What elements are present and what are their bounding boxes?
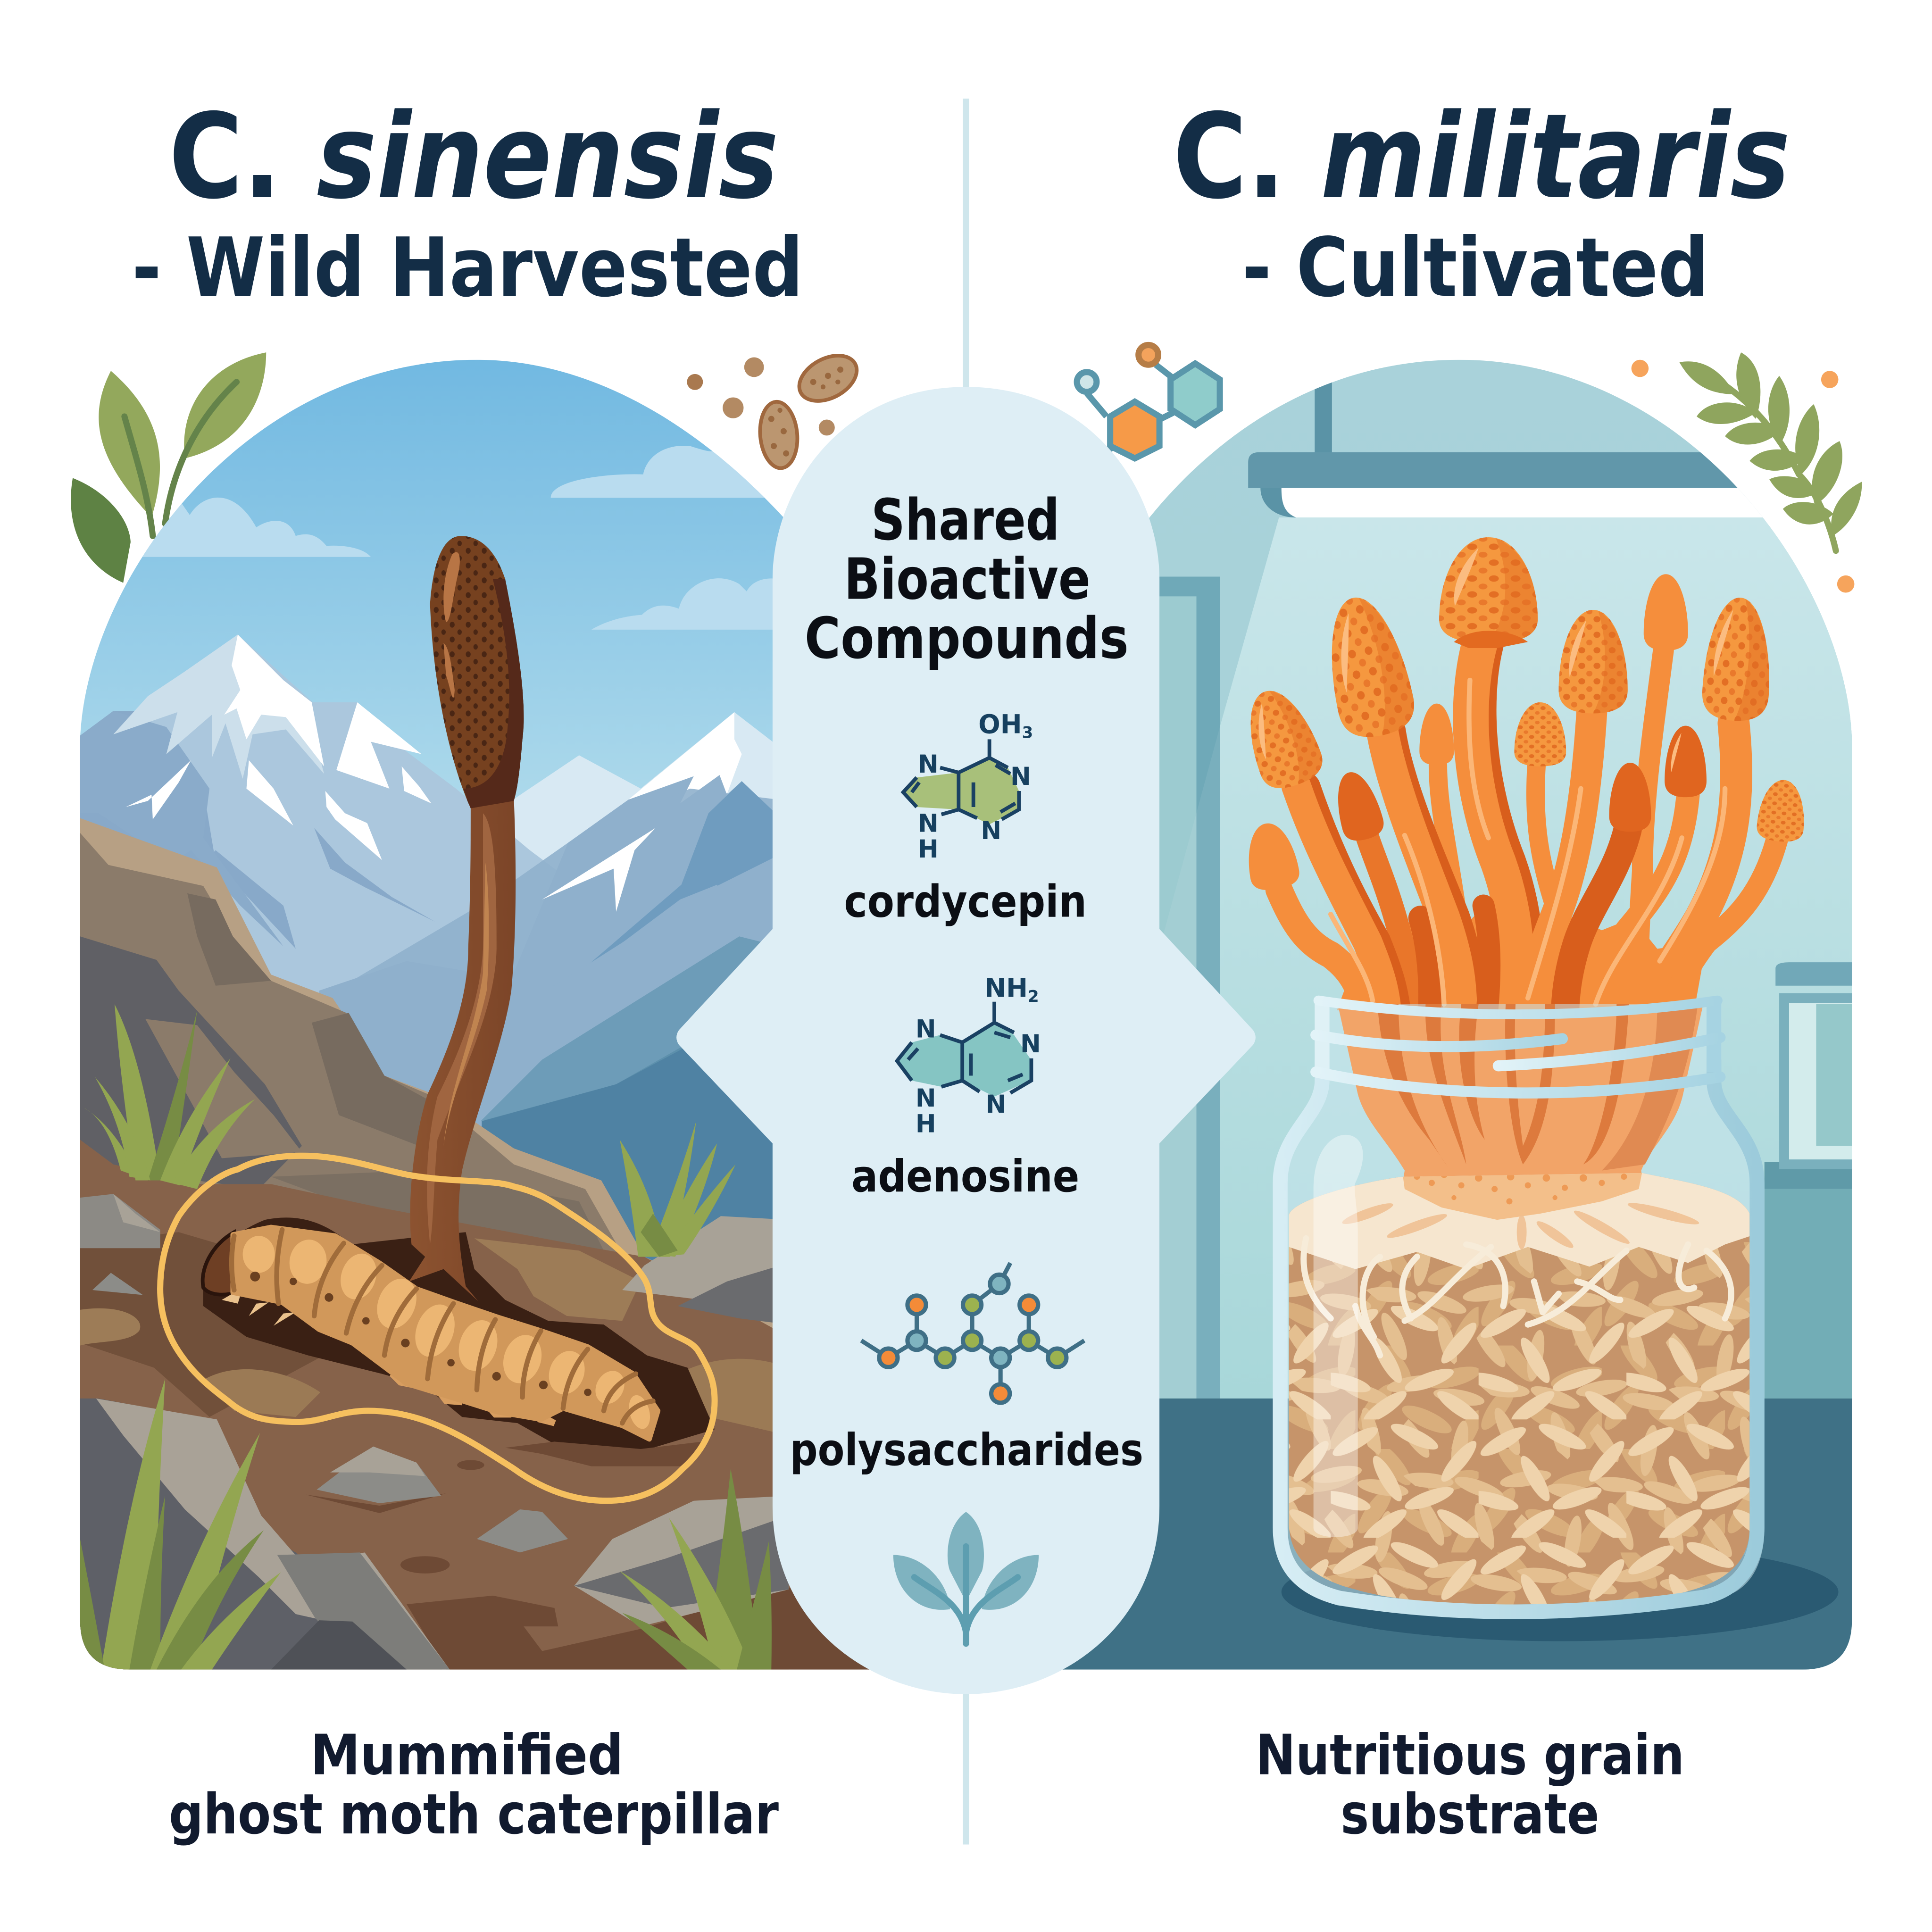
caterpillar in a burrow	[203, 1227, 658, 1439]
legs	[222, 1288, 296, 1326]
stalk highlights	[1331, 680, 1725, 1004]
body highlights	[243, 1236, 653, 1431]
icon: molecule top right	[1069, 345, 1220, 475]
icon: green sprig	[1679, 352, 1862, 551]
heading: shared bioactive compounds: Bioactive	[844, 547, 1091, 613]
snow	[113, 634, 742, 860]
chem icon: adenosine: N	[986, 1091, 1007, 1119]
orange funnel of stalks in the neck	[1337, 1000, 1704, 1201]
panel: shared bioactive compounds	[676, 387, 1256, 1694]
orange mushroom cluster	[1234, 537, 1807, 1023]
chem icon: cordycepin: N	[981, 817, 1001, 845]
chem icon: adenosine: N	[1020, 1030, 1041, 1058]
label: cordycepin: cordycepin	[844, 876, 1087, 928]
lamp light cone	[1152, 517, 1860, 1399]
spiracles	[250, 1272, 591, 1396]
caption: mummified ghost moth caterpillar: Mummified	[310, 1723, 624, 1788]
centre divider line	[965, 99, 967, 1845]
wall	[961, 351, 1860, 1682]
right mountain	[568, 775, 758, 843]
icon: sprout	[893, 1512, 1039, 1644]
label: polysaccharides: polysaccharides	[790, 1424, 1143, 1476]
stalks	[1279, 643, 1777, 1023]
mushroom cap	[430, 536, 524, 808]
caption: nutritious grain substrate: Nutritious grain	[1256, 1723, 1684, 1788]
icon: leaves top left	[71, 352, 266, 583]
chem icon: polysaccharide chain	[861, 1263, 1084, 1403]
glass fill	[1273, 1004, 1765, 1615]
chem icon: adenosine: N	[916, 1016, 936, 1044]
chem icon: adenosine: H	[916, 1110, 936, 1139]
chem icon: cordycepin: N	[918, 750, 939, 779]
chem icon: adenosine: N	[916, 1084, 936, 1113]
door frame	[1159, 577, 1220, 1402]
orange dots	[1632, 360, 1854, 592]
panel: wild mountain scene	[80, 359, 870, 1670]
jar shadow	[1282, 1543, 1838, 1641]
caption: nutritious grain substrate	[1256, 1723, 1684, 1847]
chem icon: adenosine: NH	[984, 973, 1028, 1003]
caption: mummified ghost moth caterpillar: ghost moth caterpillar	[169, 1782, 779, 1847]
jar highlight	[1314, 1135, 1363, 1537]
orange speckle band	[1402, 1171, 1642, 1220]
soil	[80, 1140, 974, 1676]
cliff: mid	[80, 833, 631, 1269]
lower blue ridge	[319, 858, 773, 1127]
caption: nutritious grain substrate: substrate	[1341, 1782, 1599, 1847]
heading: shared bioactive compounds	[805, 487, 1129, 672]
highlight loop around caterpillar	[160, 1156, 715, 1501]
table	[961, 1399, 1860, 1676]
neck rings	[1316, 1000, 1720, 1093]
sky	[80, 359, 783, 844]
left mountain shade	[80, 711, 296, 949]
cliff: tan	[80, 818, 789, 1676]
chem icon: cordycepin: H	[918, 835, 939, 864]
title: C. militaris - Cultivated: - Cultivated	[1242, 220, 1709, 315]
icon: brown spores	[687, 346, 865, 470]
chem icon: cordycepin	[903, 709, 1033, 864]
grain mass	[1282, 1165, 1762, 1608]
chem icon: adenosine	[897, 973, 1041, 1139]
cliff: dark	[80, 936, 302, 1189]
chem icon: cordycepin: N	[918, 809, 939, 838]
grass tufts	[80, 1004, 772, 1670]
chem icon: cordycepin: N	[1010, 763, 1031, 791]
chem icon: cordycepin: 3	[1022, 724, 1033, 742]
lamp	[1248, 370, 1848, 517]
main mountain	[150, 636, 543, 993]
stalk base mass	[1337, 893, 1707, 1010]
title: C. militaris - Cultivated: C. militaris	[1173, 89, 1790, 225]
rocks in soil	[80, 1194, 789, 1626]
heading: shared bioactive compounds: Compounds	[805, 606, 1129, 672]
label: adenosine: adenosine	[851, 1151, 1079, 1202]
rocks lower left	[80, 1399, 450, 1676]
chem icon: adenosine: 2	[1028, 987, 1039, 1006]
caps	[1234, 537, 1807, 893]
title: C. sinensis - Wild Harvested: - Wild Harvested	[132, 220, 803, 315]
panel: cultivation lab scene	[961, 351, 1860, 1682]
mushroom stem	[409, 797, 516, 1301]
glass jar with grain substrate	[1273, 1000, 1765, 1615]
title: C. militaris - Cultivated	[1173, 89, 1790, 315]
chem icon: cordycepin: OH	[978, 709, 1022, 739]
shelf with background jar	[1765, 962, 1860, 1399]
burrow	[203, 1217, 715, 1451]
body	[233, 1227, 658, 1439]
glass wall	[1280, 1060, 1757, 1612]
head	[203, 1232, 239, 1295]
title: C. sinensis - Wild Harvested	[132, 89, 803, 315]
caption: mummified ghost moth caterpillar	[169, 1723, 779, 1847]
clouds	[133, 446, 779, 630]
title: C. sinensis - Wild Harvested: C. sinensis	[169, 89, 779, 225]
far right peak	[514, 712, 773, 860]
heading: shared bioactive compounds: Shared	[871, 487, 1060, 553]
segment lines	[232, 1230, 653, 1423]
